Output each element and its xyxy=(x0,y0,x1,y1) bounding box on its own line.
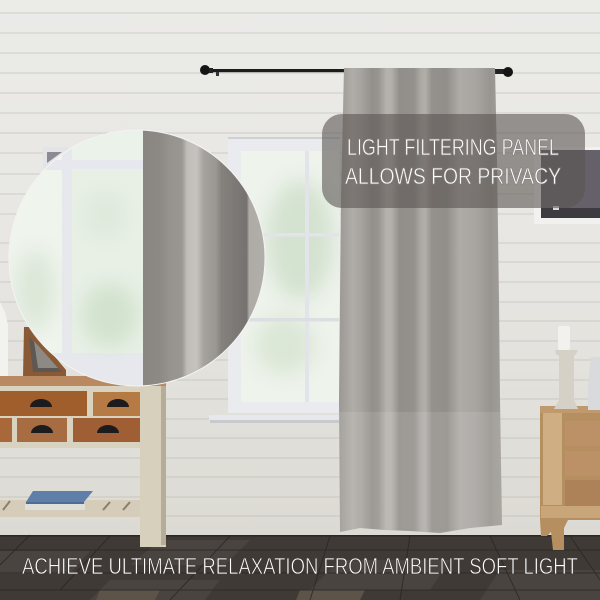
vase xyxy=(588,357,600,410)
books xyxy=(25,491,93,510)
callout text: ALLOWS FOR PRIVACY xyxy=(345,163,561,189)
picture frame on table xyxy=(23,327,66,377)
panel: light filtering callout xyxy=(322,114,585,208)
window sill xyxy=(209,415,339,423)
window xyxy=(228,137,340,413)
magnifier circle xyxy=(8,130,266,386)
small window corner behind magnifier xyxy=(43,147,68,169)
glass jar on table xyxy=(0,302,8,376)
candle holder xyxy=(554,326,578,409)
curtain panel xyxy=(339,68,502,533)
zoomed glass xyxy=(5,125,144,353)
console table xyxy=(0,376,166,547)
drawer row xyxy=(0,391,143,442)
table leg xyxy=(140,386,166,547)
floor xyxy=(0,535,600,600)
dresser xyxy=(540,406,600,550)
callout text xyxy=(345,134,561,189)
curtain rod xyxy=(200,65,513,77)
zoomed curtain xyxy=(143,125,268,390)
framed picture xyxy=(534,147,600,224)
